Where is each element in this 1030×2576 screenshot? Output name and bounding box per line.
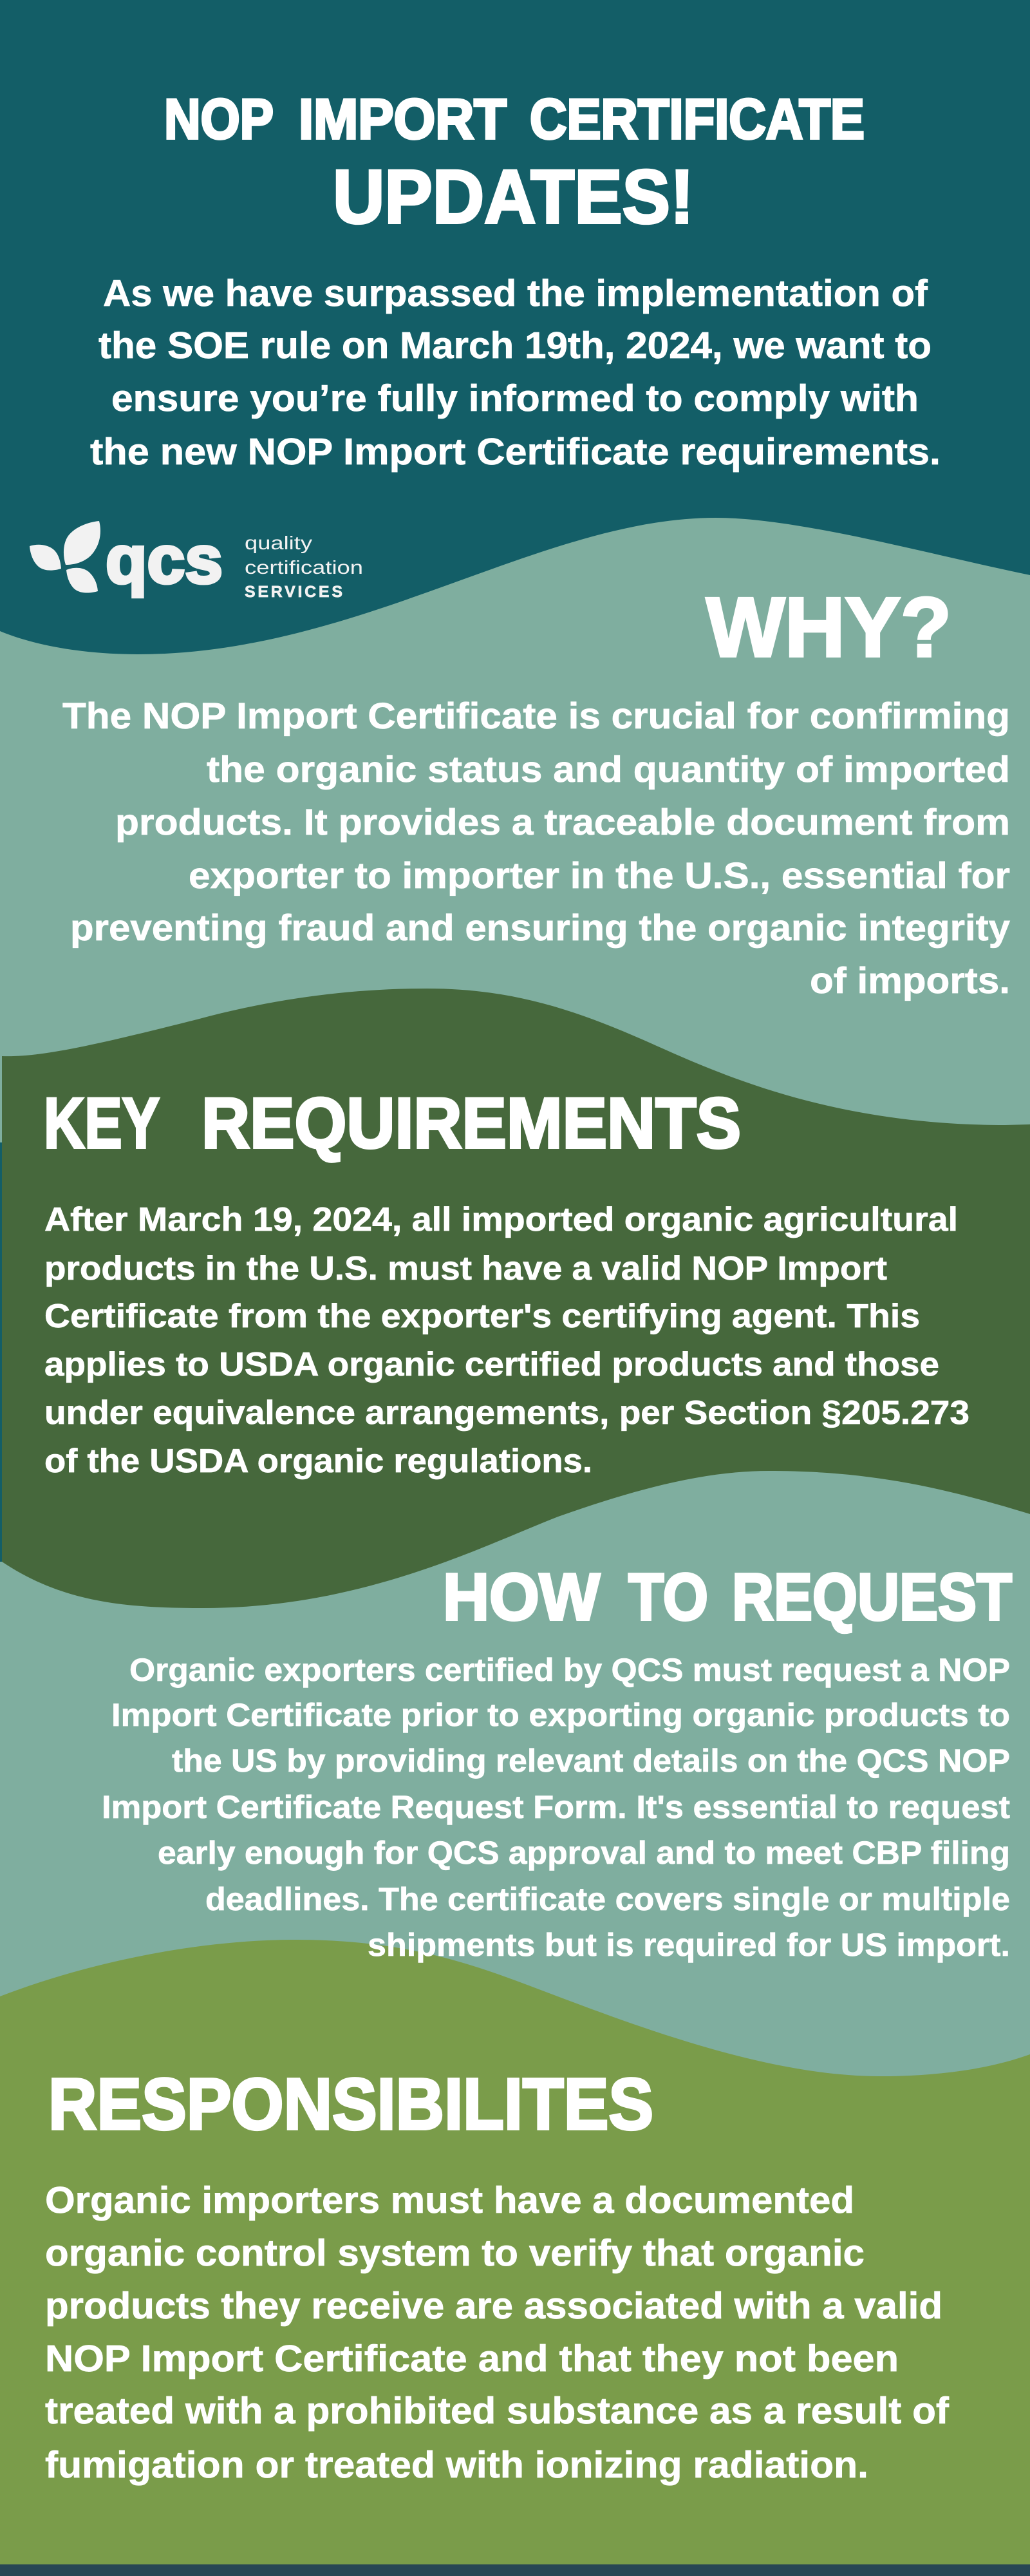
text block: key requirements: applies to USDA organic certified products and those — [44, 1346, 939, 1383]
wordmark: quality certification services: certification — [245, 558, 363, 578]
panel: key requirements wave — [2, 989, 1030, 1608]
wordmark: quality certification services — [245, 533, 363, 601]
wordmark: qcs: qcs — [106, 522, 223, 598]
text block: responsibilities: Organic importers must have a documented — [45, 2179, 854, 2221]
text block: why: preventing fraud and ensuring the organic integrity — [70, 907, 1010, 949]
text block: why: exporter to importer in the U.S., essential for — [189, 855, 1010, 896]
text block: why: of imports. — [810, 960, 1010, 1001]
text block: why: products. It provides a traceable document from — [115, 802, 1010, 843]
text block: how to request: shipments but is required for US import. — [368, 1927, 1010, 1963]
heading: how to request: TO — [628, 1560, 708, 1634]
intro text block: the new NOP Import Certificate requirements. — [90, 431, 941, 473]
intro text block — [90, 272, 941, 473]
text block: how to request: Import Certificate Request Form. It's essential to request — [102, 1789, 1010, 1825]
text block: key requirements: of the USDA organic regulations. — [44, 1443, 592, 1480]
text block: why — [62, 696, 1010, 1001]
text block: why: The NOP Import Certificate is crucial for confirming — [62, 696, 1010, 737]
text block: how to request: deadlines. The certificate covers single or multiple — [205, 1881, 1010, 1917]
wordmark: quality certification services: quality — [245, 533, 313, 554]
heading: how to request — [443, 1560, 1012, 1634]
left edge sliver — [0, 1142, 2, 1562]
text block: key requirements: products in the U.S. must have a valid NOP Import — [44, 1250, 887, 1287]
title: NOP — [164, 87, 274, 151]
text block: how to request: early enough for QCS approval and to meet CBP filing — [158, 1835, 1010, 1871]
intro text block: ensure you’re fully informed to comply with — [111, 377, 919, 419]
wordmark: quality certification services: SERVICES — [245, 583, 342, 601]
heading: responsibilities: RESPONSIBILITES — [48, 2063, 653, 2145]
heading: how to request: HOW — [443, 1560, 601, 1634]
panel: responsibilities wave — [0, 1940, 1030, 2564]
text block: key requirements: After March 19, 2024, all imported organic agricultural — [44, 1201, 958, 1238]
heading: why: WHY? — [706, 580, 951, 674]
text block: how to request: Import Certificate prior to exporting organic products to — [111, 1697, 1010, 1733]
title: UPDATES! — [333, 155, 694, 240]
logo: QCS — [30, 521, 363, 601]
text block: how to request: the US by providing relevant details on the QCS NOP — [172, 1743, 1010, 1779]
heading: key requirements: REQUIREMENTS — [201, 1083, 741, 1163]
text block: how to request: Organic exporters certified by QCS must request a NOP — [129, 1652, 1010, 1688]
text block: key requirements: under equivalence arrangements, per Section §205.273 — [44, 1394, 969, 1432]
text block: responsibilities: products they receive are associated with a valid — [45, 2285, 942, 2327]
intro text block: As we have surpassed the implementation of — [103, 272, 928, 314]
title — [164, 87, 865, 240]
text block: key requirements: Certificate from the exporter's certifying agent. This — [44, 1298, 920, 1335]
text block: responsibilities: fumigation or treated with ionizing radiation. — [45, 2444, 868, 2486]
text block: responsibilities: organic control system to verify that organic — [45, 2232, 865, 2274]
text block: responsibilities: NOP Import Certificate and that they not been — [45, 2338, 899, 2380]
title: IMPORT — [299, 87, 507, 151]
text block: how to request — [102, 1652, 1010, 1963]
panel: header wave — [0, 0, 1030, 654]
text block: responsibilities — [45, 2179, 950, 2486]
text block: responsibilities: treated with a prohibited substance as a result of — [45, 2390, 950, 2432]
icon: three leaves — [30, 521, 100, 593]
title: CERTIFICATE — [530, 87, 865, 151]
heading: key requirements: KEY — [44, 1083, 160, 1163]
footer bar — [0, 2564, 1030, 2576]
text block: key requirements — [44, 1201, 969, 1480]
text block: why: the organic status and quantity of imported — [207, 749, 1010, 790]
intro text block: the SOE rule on March 19th, 2024, we want to — [98, 325, 932, 366]
